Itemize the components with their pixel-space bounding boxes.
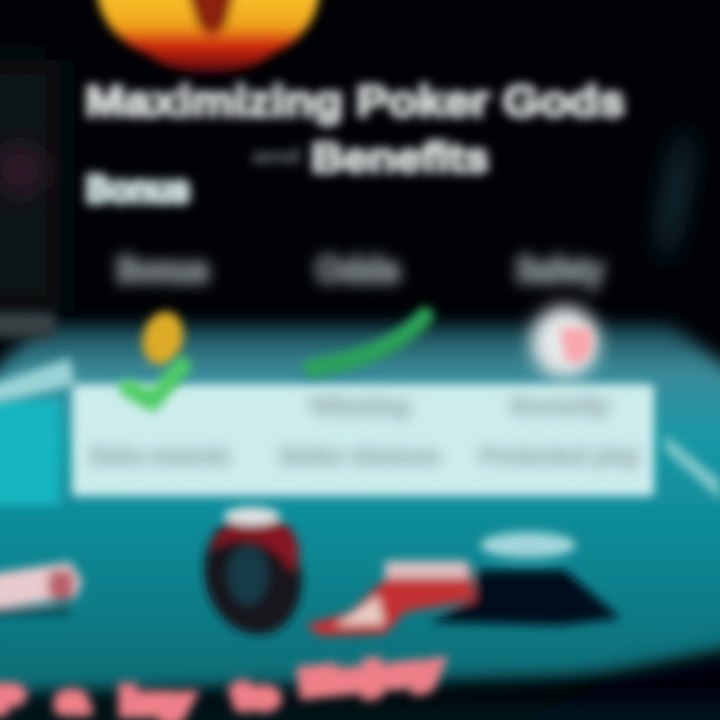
icon: gold coin bbox=[137, 307, 189, 369]
column headings: Odds bbox=[316, 249, 400, 290]
section label: Bonus bbox=[86, 169, 190, 211]
footer text in pink: to bbox=[234, 675, 278, 716]
column text: benefits bbox=[90, 393, 641, 470]
panel: benefits text card bbox=[72, 384, 654, 496]
column text: benefits: Protected play bbox=[480, 443, 641, 470]
title bbox=[85, 77, 625, 181]
footer text in pink: a bbox=[58, 679, 87, 720]
icon: chip left bbox=[0, 562, 82, 615]
column headings: Safety bbox=[516, 249, 604, 290]
column text: benefits: Extra rewards bbox=[90, 443, 230, 470]
icon: rising green line bbox=[312, 316, 425, 368]
column text: benefits: Winning bbox=[310, 393, 410, 420]
icon: flames bbox=[96, 0, 320, 72]
icon: green check mark bbox=[128, 366, 182, 402]
column text: benefits: Security bbox=[510, 393, 611, 420]
footer text in pink: Enjoy bbox=[299, 648, 442, 703]
icon: chip stack and poker hand bbox=[192, 505, 620, 645]
panel: poker table surface bbox=[0, 312, 720, 720]
column headings: Bonus bbox=[117, 249, 209, 290]
column text: benefits: Better chances bbox=[280, 443, 440, 470]
title: Maximizing Poker Gods bbox=[85, 77, 625, 126]
icon: shield bbox=[531, 306, 599, 378]
footer text in pink bbox=[0, 648, 442, 720]
title: and bbox=[252, 146, 300, 168]
column headings bbox=[117, 249, 604, 290]
title: Benefits bbox=[311, 134, 489, 181]
